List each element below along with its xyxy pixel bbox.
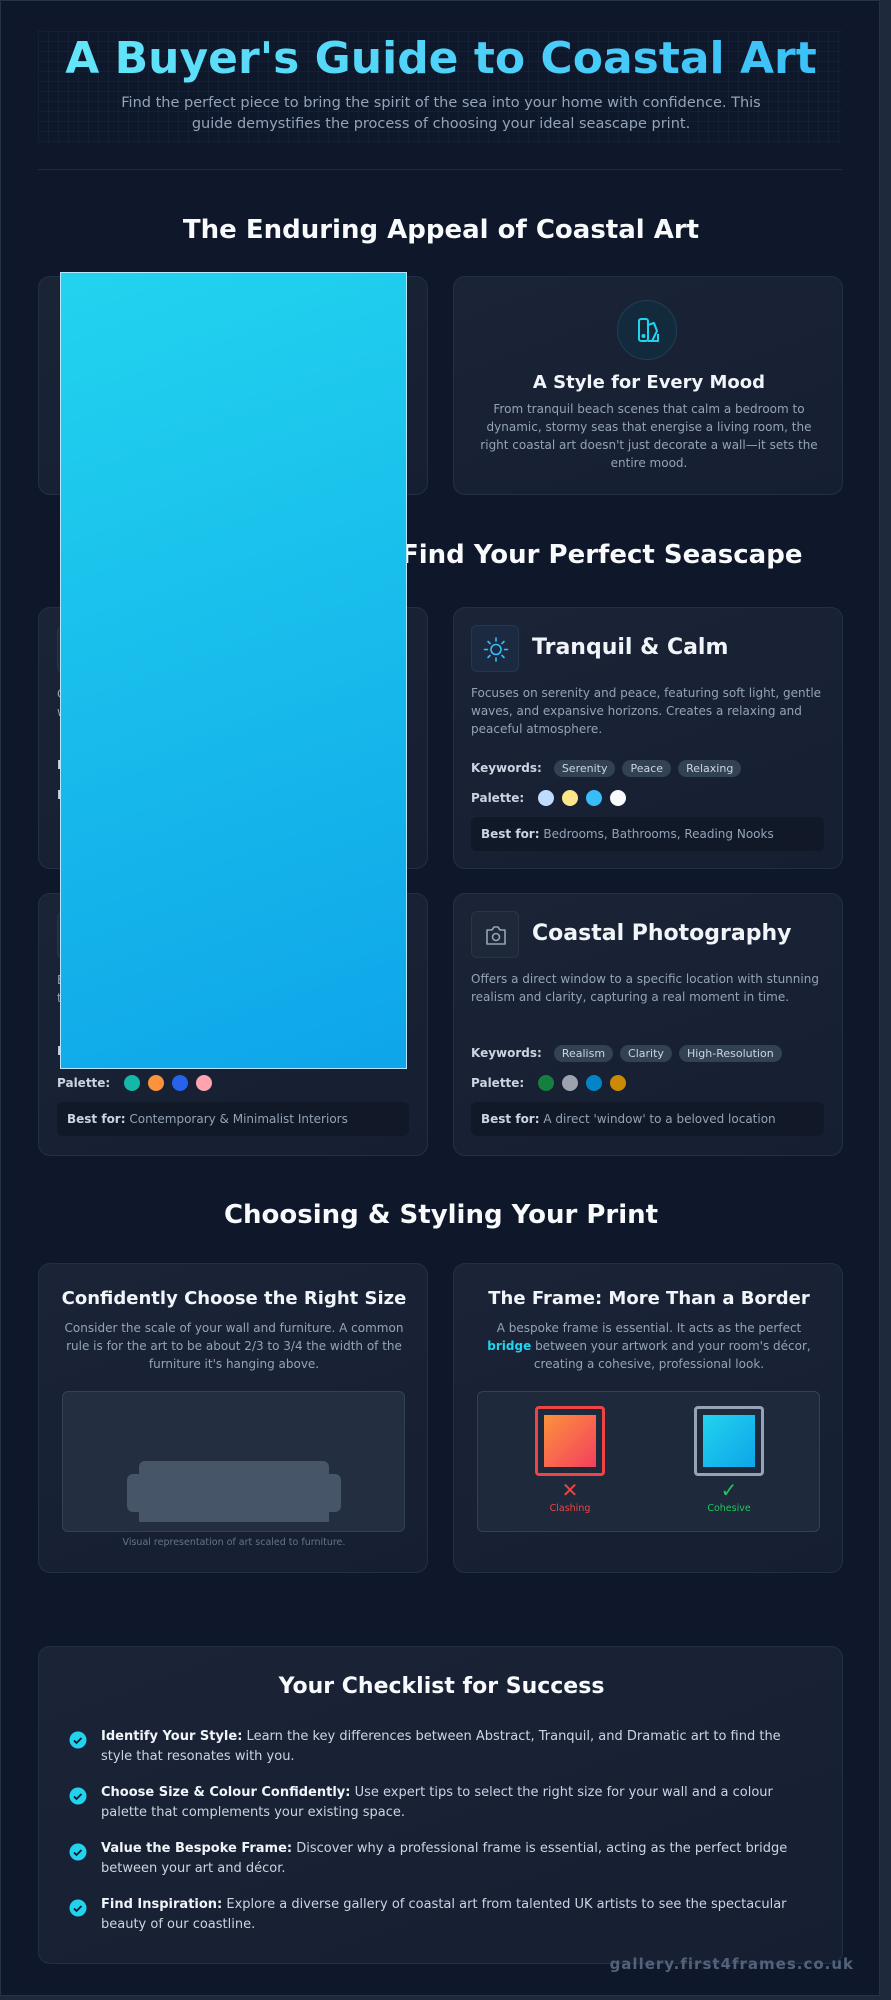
caption: Visual representation of art scaled to furniture. — [123, 1537, 345, 1548]
panel: coastal photography — [453, 893, 843, 1156]
keywords row: Clarity — [628, 1047, 664, 1060]
text: frame title: The Frame: More Than a Border — [488, 1288, 810, 1309]
text: frame description: A bespoke frame is essential. It acts as the perfect bridge between your artwork and your room's décor, creating a cohesive, professional look. — [487, 1321, 811, 1371]
text: mood description: From tranquil beach scenes that calm a bedroom to dynamic, stormy seas that energise a living room, the right coastal art doesn't just decorate a wall—it sets the entire mood. — [480, 402, 818, 470]
panel: dramatic (hidden): Palette: — [57, 788, 110, 802]
best for box — [471, 1102, 824, 1136]
keywords row: Serenity — [562, 762, 607, 775]
palette row — [471, 1075, 626, 1091]
keywords row — [471, 760, 741, 777]
text: size title: Confidently Choose the Right Size — [62, 1288, 406, 1309]
keywords row: High-Resolution — [687, 1047, 774, 1060]
panel: dramatic (hidden): Keywords: — [57, 758, 128, 772]
text: mood heading: A Style for Every Mood — [533, 372, 765, 393]
best for box — [57, 1102, 409, 1136]
checklist items — [70, 1729, 787, 1932]
label: cohesive: ✓ — [721, 1478, 737, 1502]
panel: dramatic (hidden): Dramatic & Stormy — [117, 634, 354, 659]
panel: left appeal card — [38, 276, 428, 495]
palette row — [471, 790, 626, 806]
item: size & colour: Choose Size & Colour Confidently: Use expert tips to select the right size for your wall and a colour palette that complements your existing space. — [101, 1785, 773, 1820]
text: tranquil title: Tranquil & Calm — [532, 635, 728, 660]
best for box — [471, 817, 824, 851]
panel: checklist — [38, 1646, 843, 1964]
chart: frame comparison — [477, 1391, 820, 1532]
overlay: blue image block — [60, 272, 407, 1069]
icon: cohesive frame — [694, 1406, 764, 1476]
panel: abstract: Abstract & Modern — [117, 920, 351, 945]
header background grid — [38, 31, 842, 143]
icon: sun — [471, 625, 519, 672]
text: size description: Consider the scale of your wall and furniture. A common rule is for the art to be about 2/3 to 3/4 the width of the furniture it's hanging above. — [65, 1321, 403, 1371]
panel: abstract: Keywords: — [57, 1044, 128, 1058]
palette row: Palette: — [471, 790, 524, 804]
keywords row: Keywords: — [471, 1046, 542, 1060]
title: A Buyer's Guide to Coastal Art — [65, 33, 817, 84]
palette row — [57, 1075, 212, 1091]
text: photography title: Coastal Photography — [532, 921, 792, 946]
keywords row — [471, 1045, 782, 1062]
subtitle: Find the perfect piece to bring the spirit of the sea into your home with confidence. This guide demystifies the process of choosing your ideal seascape print. — [121, 95, 761, 132]
chart: sofa visual — [62, 1391, 405, 1532]
panel: abstract: Bold shapes and colour fields that evoke the feeling of the coast, creating a contemporary focal point. — [57, 973, 384, 1005]
item: bespoke frame: Value the Bespoke Frame: Discover why a professional frame is essential, acting as the perfect bridge between your art and décor. — [101, 1841, 787, 1876]
item: identify style: Identify Your Style: Learn the key differences between Abstract, Tranquil, and Dramatic art to find the style that resonates with you. — [101, 1729, 781, 1764]
panel: dramatic (hidden) — [38, 607, 428, 869]
label: clashing: ✕ — [562, 1478, 578, 1502]
best for box: Best for: A direct 'window' to a beloved location — [481, 1112, 776, 1126]
item: inspiration: Find Inspiration: Explore a diverse gallery of coastal art from talented UK artists to see the spectacular beauty of our coastline. — [101, 1897, 787, 1932]
palette row: Palette: — [57, 1076, 110, 1090]
keywords row: Peace — [630, 762, 663, 775]
best for box: Best for: Bedrooms, Bathrooms, Reading Nooks — [481, 827, 774, 841]
text: tranquil description: Focuses on serenity and peace, featuring soft light, gentle waves, and expansive horizons. Creates a relaxing and peaceful atmosphere. — [471, 686, 821, 736]
keywords row: Keywords: — [471, 761, 542, 775]
label: cohesive — [707, 1478, 751, 1514]
text: photography description: Offers a direct window to a specific location with stunning realism and clarity, capturing a real moment in time. — [471, 972, 819, 1004]
panel: style for every mood — [453, 276, 843, 495]
label: clashing: Clashing — [550, 1503, 590, 1514]
icon: palette circle — [617, 300, 677, 360]
keywords row: Relaxing — [686, 762, 733, 775]
icon: clashing frame — [535, 1406, 605, 1476]
label: cohesive: Cohesive — [707, 1503, 751, 1514]
text: checklist title: Your Checklist for Success — [279, 1674, 604, 1699]
panel: dramatic (hidden): Captures the raw power of the ocean with crashing waves, dark skies and bold energy for striking spaces. — [57, 687, 383, 719]
heading: choosing & styling: Choosing & Styling Your Print — [224, 1200, 658, 1230]
heading: find your seascape: Find Your Perfect Seascape — [401, 540, 802, 570]
best for box: Best for: Contemporary & Minimalist Interiors — [67, 1112, 348, 1126]
panel: tranquil & calm — [453, 607, 843, 869]
panel: frame — [453, 1263, 843, 1573]
palette row: Palette: — [471, 1076, 524, 1090]
panel: size — [38, 1263, 428, 1573]
footer: site url: gallery.first4frames.co.uk — [610, 1955, 854, 1973]
keywords row: Realism — [562, 1047, 605, 1060]
panel: abstract — [38, 893, 428, 1156]
label: clashing — [550, 1478, 590, 1514]
icon: camera — [471, 911, 519, 958]
heading: enduring appeal: The Enduring Appeal of Coastal Art — [183, 215, 699, 245]
